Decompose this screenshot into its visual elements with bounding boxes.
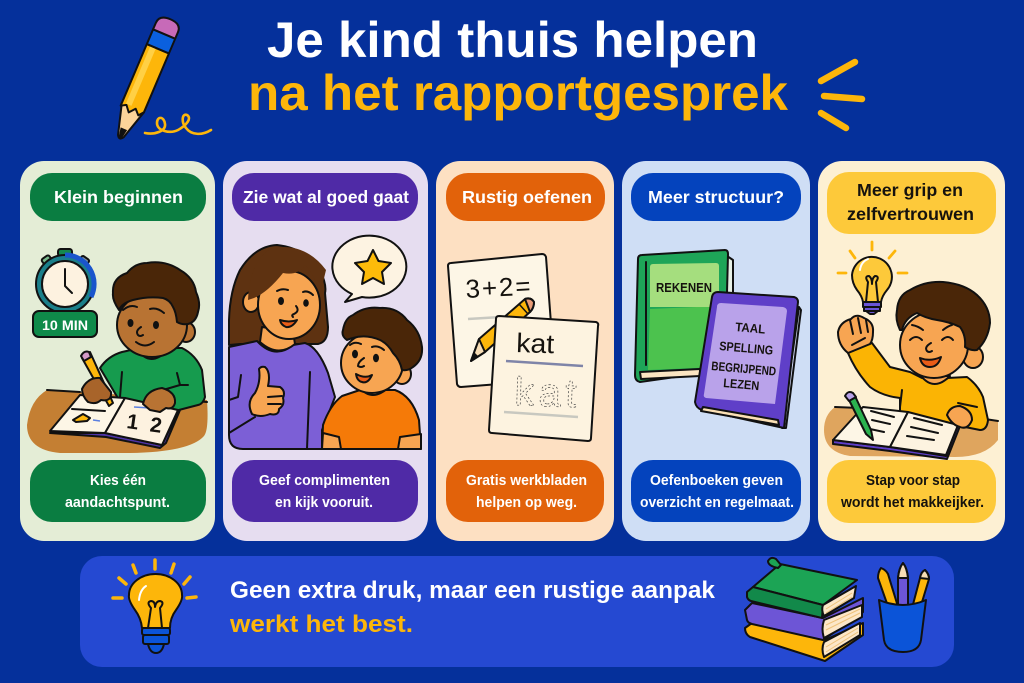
caption: stap voor stap [827,460,996,523]
caption: kies een aandachtspunt: aandachtspunt. [65,495,170,511]
title [248,12,788,121]
banner: bottom message [80,556,954,667]
illustration: boy writing [100,262,205,411]
icon: green book rekenen: REKENEN [656,281,712,295]
caption: kies een aandachtspunt: Kies één [90,473,146,489]
icon: purple book taal: LEZEN [723,376,760,393]
icon: green book rekenen [635,250,733,382]
panel: meer structuur [622,161,810,541]
icon: pencil cup [878,563,929,652]
illustration: happy boy raising fist [838,282,990,430]
icon: stopwatch 10 min: 10 MIN [42,317,88,333]
heading: meer grip: zelfvertrouwen [847,204,974,224]
icon: speech bubble with star [332,236,406,302]
icon: stack of books [745,558,863,661]
caption: geef complimenten [232,460,418,522]
illustration: smiling boy in orange shirt [322,308,422,449]
heading: rustig oefenen: Rustig oefenen [462,187,592,207]
caption: kies een aandachtspunt [30,460,206,522]
heading: meer structuur: Meer structuur? [648,187,784,207]
heading: klein beginnen: Klein beginnen [54,187,183,207]
worksheet: kat tracing: kat [516,328,555,359]
heading: meer structuur [631,173,801,221]
heading: rustig oefenen [446,173,605,221]
text: message: werkt het best. [229,611,413,638]
panel: klein beginnen [20,161,215,541]
caption: stap voor stap: wordt het makkeijker. [840,495,984,511]
panel: rustig oefenen [436,161,614,541]
heading: zie wat al goed gaat: Zie wat al goed gaat [243,187,409,207]
icon: lightbulb [113,560,196,653]
icon: purple book taal: SPELLING [719,339,774,358]
caption: gratis werkbladen [446,460,604,522]
illustration: open book [50,395,180,448]
icon: purple book taal: TAAL [735,320,766,337]
caption: geef complimenten: en kijk vooruit. [275,495,373,511]
icon: stopwatch 10 min [33,249,97,337]
illustration: open book: 1 2 [125,410,166,438]
worksheet: sum: 3 + 2 = [465,271,531,304]
icon: writing pencil and hands [81,352,175,412]
illustration: table [824,407,998,457]
text: message: Geen extra druk, maar een rustige aanpak [230,577,716,604]
text: message [229,577,716,638]
caption: oefenboeken: overzicht en regelmaat. [640,495,794,511]
illustration: table [27,390,208,453]
caption: geef complimenten: Geef complimenten [259,473,390,489]
icon: pencil on worksheet [471,298,534,361]
caption: oefenboeken [631,460,801,522]
heading: meer grip [827,172,996,234]
caption: oefenboeken: Oefenboeken geven [650,473,783,489]
heading: klein beginnen [30,173,206,221]
illustration: mother with thumbs up [229,245,335,449]
caption: stap voor stap: Stap voor stap [866,473,960,489]
icon: pencil with squiggle [109,15,211,143]
caption: gratis werkbladen: helpen op weg. [476,495,577,511]
icon: sparkle rays [821,62,862,128]
icon: lightbulb with rays [838,242,907,314]
worksheet: kat tracing [489,316,598,441]
heading: meer grip: Meer grip en [857,180,963,200]
heading: zie wat al goed gaat [232,173,418,221]
illustration: open book and green pencil [833,392,972,459]
panel: meer grip en zelfvertrouwen [818,161,1005,541]
panel: zie wat al goed gaat [223,161,428,541]
icon: purple book taal [695,292,801,428]
worksheet: sum [448,254,555,387]
worksheet: kat tracing: kat [514,370,577,416]
icon: purple book taal: BEGRIJPEND [711,359,777,379]
title: Je kind thuis helpen [267,12,758,68]
caption: gratis werkbladen: Gratis werkbladen [466,473,587,489]
title: na het rapportgesprek [248,65,788,121]
